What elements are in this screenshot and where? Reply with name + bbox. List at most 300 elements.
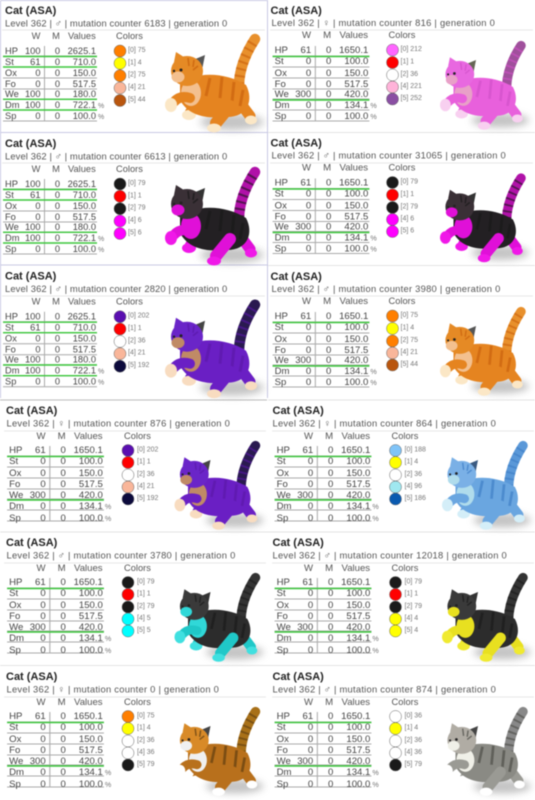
stats table: 0 <box>308 767 313 778</box>
stats table: 722.1 <box>73 100 96 110</box>
stats table: 0 <box>326 79 331 90</box>
card subtitle: Level 362 | ♂ | mutation counter 874 | generation 0 <box>272 684 496 694</box>
stats table: 0 <box>306 345 311 356</box>
color swatches: [2] 79 <box>404 603 422 610</box>
stats table: Values <box>340 296 368 307</box>
stats table: 100.0 <box>346 722 370 733</box>
stats table: St <box>275 189 284 199</box>
stats table: Sp <box>277 779 288 790</box>
color swatches <box>114 31 146 106</box>
card title: Cat (ASA) <box>5 5 57 17</box>
stats table: 300 <box>295 222 311 232</box>
stats table: W <box>32 31 41 41</box>
stats table: % <box>370 379 378 387</box>
stats table: 134.1 <box>346 633 370 644</box>
stats table: 0 <box>308 779 313 790</box>
stats table: Fo <box>5 212 16 222</box>
stats table: 150.0 <box>346 734 370 745</box>
stats table: Fo <box>275 79 286 90</box>
stats table: Sp <box>275 111 286 122</box>
stats table: Sp <box>9 779 21 790</box>
stats table: 0 <box>308 600 313 611</box>
stats table: 0 <box>326 345 331 356</box>
stats table: % <box>372 769 380 777</box>
stats table: We <box>277 490 291 501</box>
stats table: 0 <box>308 513 313 524</box>
stats table: 517.5 <box>344 79 368 90</box>
stats table: W <box>302 30 311 41</box>
color swatches: Colors <box>116 164 143 174</box>
stats table: % <box>370 113 378 121</box>
color swatches: [0] 75 <box>128 47 146 54</box>
color swatches: [0] 36 <box>404 712 422 720</box>
stats table: Sp <box>275 244 286 254</box>
stats table: 0 <box>306 377 311 388</box>
card title: Cat (ASA) <box>6 537 58 549</box>
stats table: 0 <box>326 45 331 56</box>
stats table: 100 <box>25 89 40 99</box>
stats table: 0 <box>306 68 311 79</box>
stats table: % <box>370 246 378 253</box>
stats table: Ox <box>275 201 287 211</box>
stats table: 61 <box>35 445 46 456</box>
stats table: 100 <box>25 46 40 56</box>
stats table: 0 <box>326 244 331 254</box>
stats table: Dm <box>277 633 292 644</box>
stats table: 0 <box>328 479 333 490</box>
color swatches: [1] 4 <box>404 724 418 732</box>
stats table: 0 <box>55 79 60 89</box>
stats table: Values <box>74 697 103 708</box>
stats table: 0 <box>55 345 60 355</box>
stats table: 100 <box>25 355 40 365</box>
stats table: Dm <box>277 767 292 778</box>
stats table: Dm <box>5 100 20 110</box>
color swatches: [1] 1 <box>404 590 418 598</box>
stats table: 0 <box>328 501 333 512</box>
stats table: Values <box>342 563 370 574</box>
card: mutation counter 0 <box>6 671 264 796</box>
color swatches: [2] 36 <box>137 737 155 744</box>
stats table: We <box>9 490 23 501</box>
stats table: We <box>5 89 19 99</box>
card subtitle: Level 362 | ♂ | mutation counter 2820 | generation 0 <box>5 283 227 294</box>
stats table: 150.0 <box>79 734 103 745</box>
stats table: 0 <box>35 345 40 355</box>
color swatches: [1] 4 <box>128 59 142 66</box>
stats table: 517.5 <box>79 479 103 490</box>
stats table: 517.5 <box>79 745 103 756</box>
stats table: 0 <box>60 490 66 501</box>
stats table: 517.5 <box>346 611 370 622</box>
stats table: 100.0 <box>344 377 368 388</box>
stats table <box>7 563 112 656</box>
stats table: 0 <box>328 577 333 588</box>
stats table: Values <box>74 563 103 574</box>
color swatches: [1] 1 <box>400 191 414 198</box>
stats table: Fo <box>9 479 20 490</box>
stats table: Ox <box>275 334 287 345</box>
stats table: W <box>37 697 46 708</box>
stats table: 1650.1 <box>339 178 368 188</box>
stats table: 300 <box>30 490 46 501</box>
color swatches: [5] 5 <box>137 627 151 634</box>
color swatches <box>122 431 159 505</box>
stats table: Values <box>342 697 370 708</box>
stats table: Dm <box>275 100 290 111</box>
color swatches: [4] 4 <box>404 615 418 622</box>
stats table: 0 <box>60 767 66 778</box>
stats table: 1650.1 <box>341 577 370 588</box>
stats table: 0 <box>306 212 311 222</box>
card: mutation counter 3980 <box>270 271 529 396</box>
stats table: HP <box>9 445 22 456</box>
color swatches: [1] 1 <box>137 590 151 598</box>
color swatches: [0] 188 <box>404 446 426 454</box>
stats table: 61 <box>30 190 40 200</box>
color swatches: [0] 79 <box>128 180 146 187</box>
stats table: 0 <box>308 645 313 656</box>
color swatches: [2] 79 <box>128 205 146 212</box>
stats table: 0 <box>306 100 311 111</box>
card subtitle: Level 362 | ♀ | mutation counter 864 | generation 0 <box>272 418 496 428</box>
stats table: 0 <box>308 722 313 733</box>
stats table: 0 <box>35 68 40 78</box>
stats table: 100.0 <box>79 456 103 467</box>
color swatches: [4] 36 <box>137 749 155 756</box>
stats table: 300 <box>295 89 311 100</box>
stats table: 0 <box>328 468 333 479</box>
stats table: We <box>275 355 289 366</box>
stats table: % <box>105 503 112 511</box>
stats table: 0 <box>40 468 46 479</box>
stats table: 150.0 <box>344 201 368 211</box>
stats table: Fo <box>9 611 20 622</box>
color swatches: [2] 79 <box>137 603 155 610</box>
stats table: 710.0 <box>73 190 96 200</box>
icon: purple cat <box>165 305 264 398</box>
stats table <box>7 697 112 790</box>
stats table: 134.1 <box>79 501 103 512</box>
color swatches: Colors <box>392 431 419 441</box>
card subtitle: Level 362 | ♂ | mutation counter 12018 | generation 0 <box>272 550 507 560</box>
stats table <box>275 563 380 656</box>
color swatches: [0] 79 <box>137 578 155 586</box>
stats table: 0 <box>35 79 40 89</box>
color swatches: Colors <box>124 697 151 707</box>
stats table: 517.5 <box>346 479 370 490</box>
stats table: 100.0 <box>73 377 96 387</box>
color swatches <box>390 431 426 505</box>
stats table: M <box>52 297 60 307</box>
stats table: 0 <box>306 366 311 377</box>
stats table: 0 <box>60 479 66 490</box>
card: mutation counter 12018 <box>272 537 531 662</box>
stats table: W <box>304 431 313 442</box>
stats table: 100.0 <box>346 645 370 656</box>
stats table: Ox <box>9 734 22 745</box>
stats table: Fo <box>277 745 288 756</box>
color swatches: [1] 4 <box>400 324 414 332</box>
stats table: 1650.1 <box>341 711 370 722</box>
stats table: HP <box>5 179 18 189</box>
stats table: 100.0 <box>344 189 368 199</box>
stats table: 61 <box>301 45 311 56</box>
stats table: 61 <box>35 577 46 588</box>
stats table: St <box>275 322 284 333</box>
stats table: 100.0 <box>79 645 103 656</box>
stats table: 0 <box>55 233 60 243</box>
stats table: 0 <box>40 513 46 524</box>
stats table: 0 <box>308 734 313 745</box>
stats table: % <box>98 236 104 243</box>
icon: purple cat <box>174 446 264 530</box>
stats table: 0 <box>55 244 60 254</box>
stats table: 0 <box>35 212 40 222</box>
icon: orange cat <box>440 312 529 396</box>
stats table: 2625.1 <box>68 46 96 56</box>
stats table: 0 <box>40 645 46 656</box>
stats table: 300 <box>297 490 313 501</box>
stats table: 0 <box>306 189 311 199</box>
stats table: Values <box>68 31 96 41</box>
stats table: 0 <box>326 189 331 199</box>
stats table: 0 <box>60 645 66 656</box>
icon: black and yellow cat <box>442 578 531 662</box>
stats table: 0 <box>328 445 333 456</box>
stats table: 0 <box>328 722 333 733</box>
stats table: 0 <box>328 734 333 745</box>
icon: tiger-striped cat <box>174 712 264 796</box>
stats table: 0 <box>328 611 333 622</box>
color swatches: Colors <box>392 697 419 707</box>
stats table: 100.0 <box>73 111 96 121</box>
color swatches: Colors <box>388 296 416 306</box>
stats table: HP <box>275 311 288 322</box>
stats table: W <box>37 431 46 442</box>
stats table: % <box>370 102 378 110</box>
stats table: 180.0 <box>73 89 96 99</box>
stats table: 1650.1 <box>339 311 368 322</box>
stats table: 2625.1 <box>68 312 96 322</box>
stats table: % <box>372 781 380 789</box>
stats table: 0 <box>55 366 60 376</box>
stats table: 0 <box>308 456 313 467</box>
stats table: 0 <box>326 311 331 322</box>
stats table: HP <box>5 46 18 56</box>
stats table <box>3 164 104 254</box>
stats table: HP <box>277 577 290 588</box>
stats table: 0 <box>328 633 333 644</box>
stats table: 517.5 <box>344 212 368 222</box>
stats table: We <box>9 756 23 767</box>
card title: Cat (ASA) <box>272 671 324 683</box>
stats table: 517.5 <box>79 611 103 622</box>
stats table: 100.0 <box>344 111 368 122</box>
color swatches: Colors <box>116 297 143 307</box>
color swatches <box>390 697 422 771</box>
stats table: Sp <box>5 377 16 387</box>
stats table: 0 <box>308 468 313 479</box>
stats table: 0 <box>35 334 40 344</box>
stats table: W <box>32 297 41 307</box>
stats table: 0 <box>40 456 46 467</box>
stats table: St <box>9 722 19 733</box>
stats table: St <box>5 190 14 200</box>
stats table: 1650.1 <box>74 577 103 588</box>
card title: Cat (ASA) <box>272 537 324 549</box>
stats table: Dm <box>277 501 292 512</box>
stats table: Dm <box>9 633 24 644</box>
stats table: Values <box>340 163 368 173</box>
stats table: 0 <box>306 334 311 345</box>
color swatches: [0] 79 <box>400 178 418 186</box>
stats table: 300 <box>30 622 46 633</box>
stats table: 0 <box>308 745 313 756</box>
stats table: 0 <box>55 377 60 387</box>
color swatches: [4] 21 <box>137 483 155 490</box>
stats table: St <box>277 722 286 733</box>
stats table: 0 <box>308 501 313 512</box>
stats table: 0 <box>55 46 60 56</box>
stats table: 134.1 <box>346 767 370 778</box>
icon: blue cat <box>442 446 531 530</box>
card title: Cat (ASA) <box>6 405 58 417</box>
stats table: 0 <box>326 68 331 79</box>
card subtitle: Level 362 | ♂ | mutation counter 6613 | generation 0 <box>5 150 227 162</box>
stats table: % <box>372 635 380 643</box>
stats table: 0 <box>55 57 60 67</box>
stats table: 300 <box>295 355 311 366</box>
color swatches: [2] 36 <box>128 337 146 344</box>
stats table: Fo <box>9 745 20 756</box>
stats table: 0 <box>308 588 313 599</box>
stats table: 100 <box>25 366 40 376</box>
card subtitle: Level 362 | ♂ | mutation counter 31065 | generation 0 <box>272 150 506 160</box>
stats table: 300 <box>30 756 46 767</box>
stats table: 0 <box>40 734 46 745</box>
stats table: M <box>58 563 66 574</box>
card: mutation counter 874 <box>272 671 531 796</box>
stats table: 0 <box>326 100 331 111</box>
stats table: 0 <box>55 111 60 121</box>
stats table: % <box>372 503 380 511</box>
stats table: % <box>105 515 112 523</box>
stats table: 0 <box>326 222 331 232</box>
stats table: % <box>98 369 104 376</box>
stats table: 0 <box>326 212 331 222</box>
card: mutation counter 31065 <box>270 138 529 262</box>
stats table: 61 <box>301 178 311 188</box>
stats table: Fo <box>277 611 288 622</box>
stats table: Sp <box>5 244 16 254</box>
stats table <box>273 163 378 254</box>
stats table: 0 <box>326 233 331 243</box>
color swatches: [5] 44 <box>128 96 146 104</box>
stats table: Dm <box>5 233 20 243</box>
stats table: 0 <box>328 645 333 656</box>
card: mutation counter 6613 <box>3 138 264 266</box>
card title: Cat (ASA) <box>6 671 58 683</box>
stats table: Values <box>342 431 370 442</box>
stats table: % <box>98 247 104 254</box>
card title: Cat (ASA) <box>272 405 324 417</box>
stats table: 517.5 <box>73 212 96 222</box>
stats table: 722.1 <box>73 233 96 243</box>
stats table: % <box>372 647 380 655</box>
stats table: 100 <box>25 312 40 322</box>
stats table: 0 <box>60 734 66 745</box>
stats table: 0 <box>326 56 331 67</box>
stats table: HP <box>275 178 288 188</box>
stats table: 1650.1 <box>74 445 103 456</box>
color swatches: [0] 79 <box>404 578 422 586</box>
stats table: 61 <box>303 577 313 588</box>
stats table: St <box>9 456 19 467</box>
stats table: 0 <box>306 201 311 211</box>
stats table: 0 <box>60 622 66 633</box>
stats table: St <box>277 456 286 467</box>
color swatches: [4] 6 <box>400 216 414 222</box>
stats table: 0 <box>60 513 66 524</box>
stats table: 0 <box>40 501 46 512</box>
stats table: 0 <box>60 779 66 790</box>
stats table: 61 <box>301 311 311 322</box>
stats table: 300 <box>297 756 313 767</box>
card title: Cat (ASA) <box>270 271 322 283</box>
color swatches: [2] 75 <box>400 337 418 344</box>
card title: Cat (ASA) <box>270 138 322 150</box>
color swatches: [4] 96 <box>404 483 422 490</box>
stats table: % <box>98 380 104 387</box>
icon: black and magenta cat <box>165 172 264 266</box>
stats table: 2625.1 <box>68 179 96 189</box>
stats table: 150.0 <box>79 468 103 479</box>
stats table: 100.0 <box>344 244 368 254</box>
card subtitle: Level 362 | ♀ | mutation counter 0 | generation 0 <box>6 684 219 694</box>
color swatches: [4] 221 <box>400 83 422 90</box>
stats table: 0 <box>60 722 66 733</box>
stats table: 134.1 <box>344 100 368 111</box>
stats table: Sp <box>277 645 288 656</box>
stats table: 420.0 <box>79 756 103 767</box>
stats table: HP <box>9 577 22 588</box>
stats table: Sp <box>9 645 21 656</box>
stats table: W <box>302 163 311 173</box>
stats table: 0 <box>40 767 46 778</box>
stats table: 100 <box>25 179 40 189</box>
stats table: 100 <box>25 100 40 110</box>
color swatches: [5] 252 <box>400 95 422 102</box>
stats table: W <box>32 164 41 174</box>
color swatches: [2] 75 <box>128 72 146 79</box>
stats table: 100.0 <box>344 56 368 67</box>
stats table: % <box>105 647 112 655</box>
stats table: 100.0 <box>73 244 96 254</box>
stats table: 710.0 <box>73 57 96 67</box>
card: mutation counter 864 <box>272 405 531 530</box>
stats table: 0 <box>60 445 66 456</box>
stats table: 0 <box>306 79 311 90</box>
stats table: 100.0 <box>346 588 370 599</box>
stats table: 150.0 <box>73 334 96 344</box>
color swatches: [2] 36 <box>404 737 422 744</box>
color swatches: [0] 202 <box>128 313 150 320</box>
stats table: Fo <box>5 345 16 355</box>
stats table: St <box>275 56 284 67</box>
stats table: 300 <box>297 622 313 633</box>
stats table: 0 <box>35 244 40 254</box>
